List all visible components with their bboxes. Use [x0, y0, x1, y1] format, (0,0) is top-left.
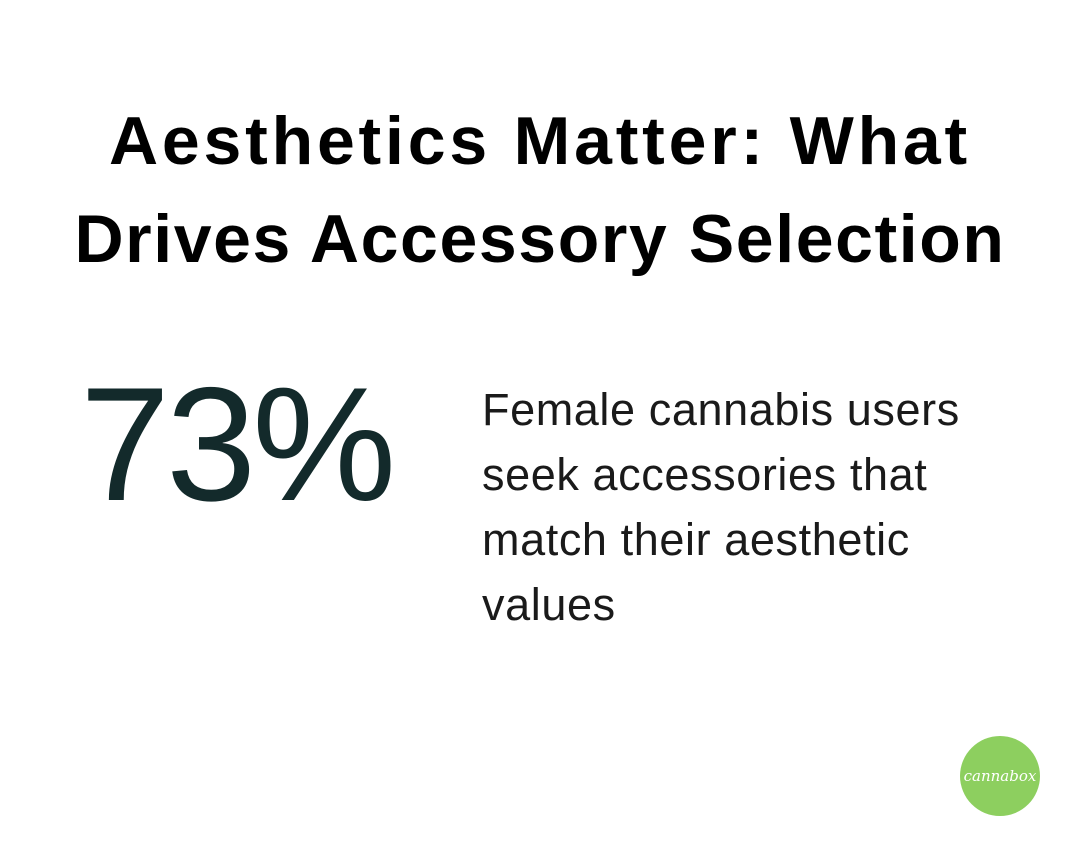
logo: cannabox: cannabox — [964, 767, 1036, 785]
title: Drives Accessory Selection — [74, 201, 1006, 277]
stat description: values — [482, 579, 616, 630]
stat description: Female cannabis users — [482, 384, 960, 435]
stat description — [482, 384, 960, 630]
stat description: seek accessories that — [482, 449, 927, 500]
logo: cannabox — [960, 736, 1040, 816]
title: Aesthetics Matter: What — [109, 103, 971, 179]
title — [74, 103, 1006, 277]
stat description: match their aesthetic — [482, 514, 910, 565]
big stat: 73%: 73% — [80, 354, 392, 535]
